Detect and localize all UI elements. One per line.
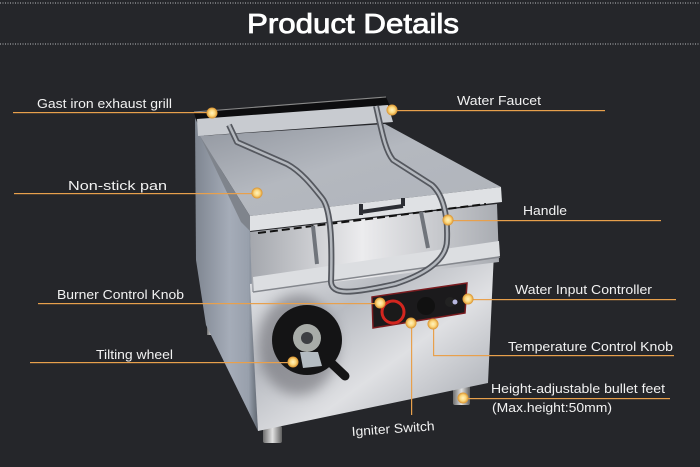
header band with dotted rules [0,3,700,44]
title: Product Details [247,8,459,39]
label: Water Faucet [386,93,605,116]
label: Igniter Switch [351,318,435,439]
label: Burner Control Knob [38,287,386,308]
label: Water Input Controller: Water Input Controller [515,282,653,297]
label: Non-stick pan [14,178,262,198]
label: Burner Control Knob: Burner Control Knob [57,287,184,302]
panel struts [313,212,428,264]
lid grip [361,198,403,215]
back panel [197,105,393,136]
label: Non-stick pan: Non-stick pan [68,178,167,193]
illustration: tilting pan machine [194,97,502,443]
rail under the panel [253,241,500,292]
lid left bevel [200,136,250,231]
label: Height-adjustable bullet feet: (Max.height:50mm) [492,400,612,415]
label: Gast iron exhaust grill: Gast iron exhaust grill [37,96,172,111]
label: Gast iron exhaust grill [13,96,218,118]
middle front panel [250,204,499,292]
label: Water Faucet: Water Faucet [457,93,541,108]
label: Height-adjustable bullet feet [458,381,670,415]
lower body front [250,252,494,431]
back foot [207,316,216,335]
label: Igniter Switch: Igniter Switch [351,418,435,439]
handle [229,106,447,292]
label: Handle: Handle [523,203,567,218]
grill strip [194,97,390,119]
label: Temperature Control Knob [428,318,674,356]
lid front band [250,187,502,231]
label: Height-adjustable bullet feet: Height-adjustable bullet feet [491,381,665,396]
label: Tilting wheel: Tilting wheel [96,347,173,362]
control panel [372,283,467,328]
tilting wheel [272,305,342,375]
wheel shadow [258,295,338,395]
dashed vent line [258,204,486,233]
front left foot [263,426,282,443]
side panel [195,118,258,431]
front right foot [453,385,470,405]
label: Temperature Control Knob: Temperature Control Knob [508,339,673,354]
label: Handle [442,203,661,226]
label: Water Input Controller [462,282,676,304]
lid top [200,124,501,216]
label: Tilting wheel [30,347,298,368]
